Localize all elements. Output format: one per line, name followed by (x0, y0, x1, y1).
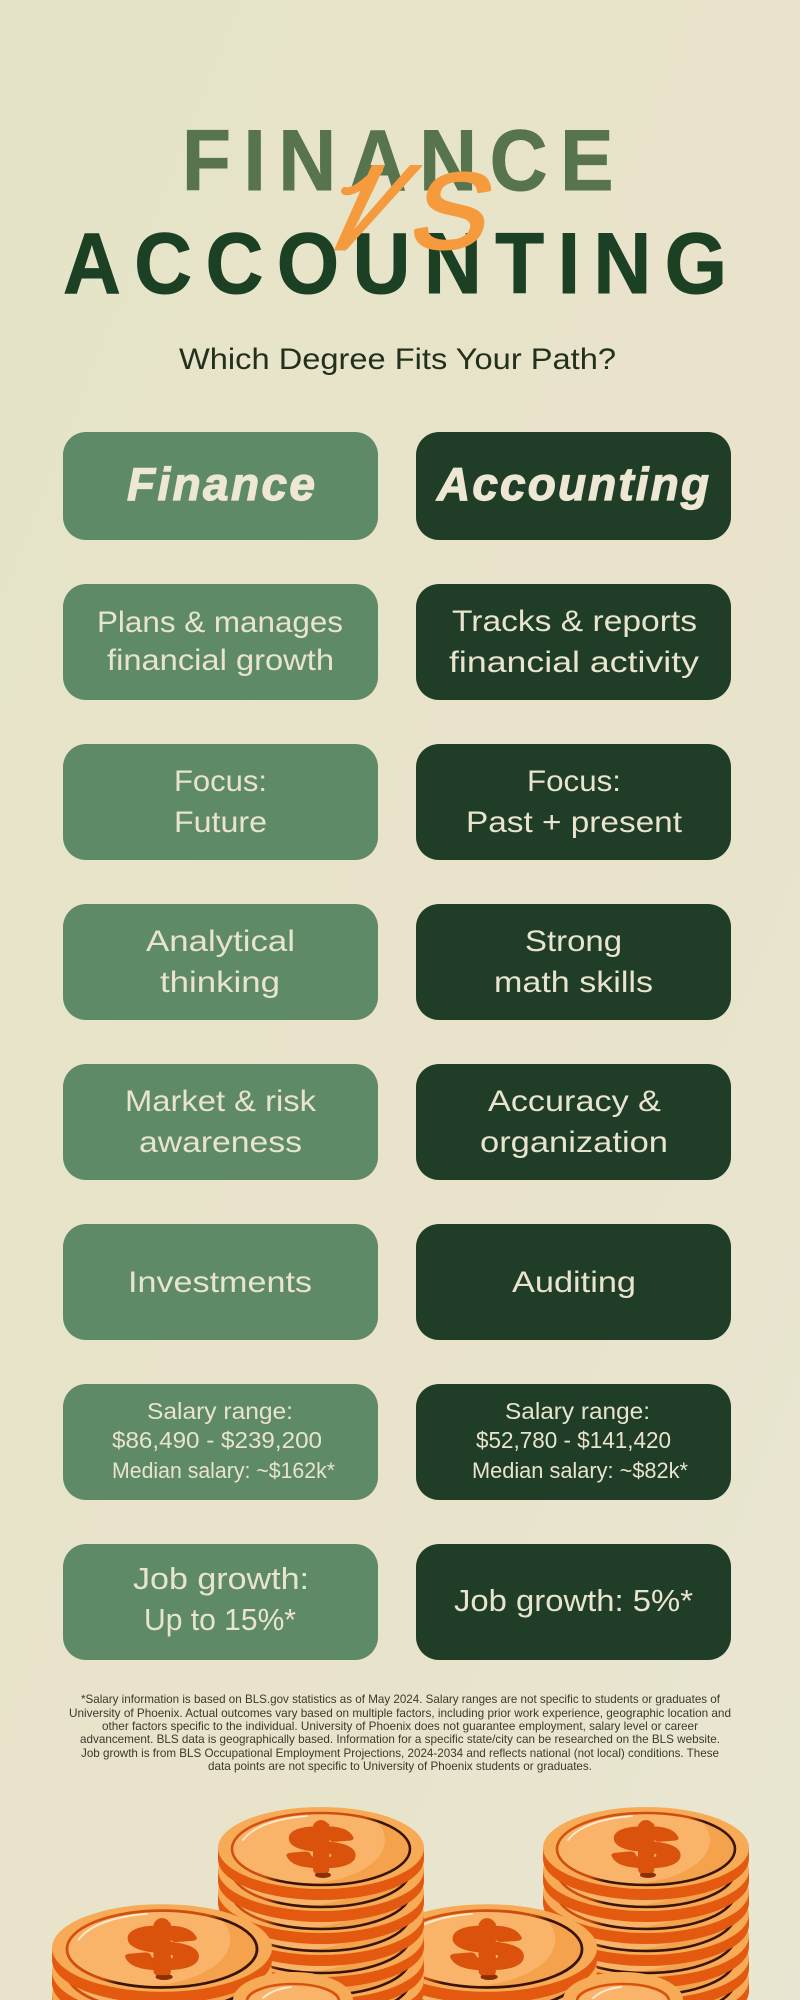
finance: awareness: Market & risk (125, 1085, 317, 1118)
title (63, 112, 727, 312)
coin stack: front left: $ (129, 1914, 195, 1981)
accounting: salary: Median salary: ~$82k* (472, 1458, 688, 1483)
panel: accounting column (416, 432, 731, 1660)
footnote: Job growth is from BLS Occupational Employment Projections, 2024-2034 and reflects national (not local) conditions. These (81, 1746, 719, 1760)
accounting: accuracy: organization (480, 1126, 668, 1159)
accounting: salary: $52,780 - $141,420 (476, 1427, 671, 1453)
accounting: skill: Strong (525, 925, 622, 958)
finance: definition: financial growth (107, 644, 334, 677)
finance: definition (63, 584, 378, 700)
accounting: focus (416, 744, 731, 860)
accounting: skill (416, 904, 731, 1020)
finance header (63, 432, 378, 540)
finance: skill: thinking (160, 966, 280, 999)
finance: salary (63, 1384, 378, 1500)
title accent: vs: S (400, 151, 506, 271)
title accent: vs: V (298, 142, 438, 275)
accounting: auditing: Auditing (512, 1266, 636, 1299)
finance: salary: Salary range: (147, 1398, 293, 1424)
footnote: advancement. BLS data is geographically based. Information for a specific state/city can be researched on the BLS website. (80, 1732, 720, 1746)
finance: focus: Future (174, 806, 267, 839)
accounting: accuracy: Accuracy & (488, 1085, 661, 1118)
accounting: focus: Focus: (527, 765, 621, 798)
accounting: definition: Tracks & reports (452, 605, 697, 638)
finance: awareness (63, 1064, 378, 1180)
finance: skill: Analytical (146, 925, 295, 958)
title: Finance: FINANCE (182, 112, 614, 209)
title accent: vs (298, 142, 506, 275)
accounting: auditing (416, 1224, 731, 1340)
accounting: job growth: Job growth: 5%* (454, 1583, 693, 1618)
finance: definition: Plans & manages (97, 606, 343, 639)
finance header: Finance (127, 458, 315, 510)
coin stack: back left: $ (290, 1816, 352, 1879)
coin stack: back left (213, 1796, 424, 2000)
accounting: definition: financial activity (449, 646, 699, 679)
finance: job growth: Up to 15%* (144, 1602, 296, 1637)
footnote: other factors specific to the individual. University of Phoenix does not guarantee employment, salary level or career (102, 1719, 698, 1733)
footnote (69, 1692, 731, 1773)
footnote: data points are not specific to University of Phoenix students or graduates. (208, 1759, 592, 1773)
panel: finance column (63, 432, 378, 1660)
coin stack: front middle: $ (454, 1914, 520, 1981)
accounting: definition (416, 584, 731, 700)
finance: job growth: Job growth: (133, 1561, 309, 1596)
accounting: skill: math skills (494, 966, 653, 999)
finance: investments (63, 1224, 378, 1340)
title: Accounting: ACCOUNTING (63, 215, 727, 312)
accounting: accuracy (416, 1064, 731, 1180)
coin stack: front left (47, 1892, 272, 2000)
finance: focus: Focus: (174, 765, 267, 798)
finance: skill (63, 904, 378, 1020)
coin stack: back right: $ (615, 1816, 677, 1879)
accounting: focus: Past + present (466, 806, 683, 839)
accounting header: Accounting (436, 458, 709, 510)
finance: investments: Investments (128, 1266, 312, 1299)
finance: job growth (63, 1544, 378, 1660)
subtitle: Which Degree Fits Your Path? (179, 343, 616, 376)
accounting: salary (416, 1384, 731, 1500)
footnote: *Salary information is based on BLS.gov statistics as of May 2024. Salary ranges are not specific to students or graduates of (81, 1692, 721, 1706)
finance: salary: $86,490 - $239,200 (112, 1427, 322, 1453)
footnote: University of Phoenix. Actual outcomes vary based on multiple factors, including prior work experience, geographic location and (69, 1706, 731, 1720)
accounting header (416, 432, 731, 540)
finance: awareness: awareness (139, 1126, 302, 1159)
coin stack: front middle (372, 1892, 597, 2000)
accounting: job growth (416, 1544, 731, 1660)
coin: small front right (563, 1972, 683, 2000)
finance: salary: Median salary: ~$162k* (112, 1458, 335, 1483)
coin stack: back right (538, 1796, 749, 2000)
accounting: salary: Salary range: (505, 1398, 650, 1424)
coin: small front left (233, 1972, 353, 2000)
icon: coin stacks (47, 1796, 749, 2000)
finance: focus (63, 744, 378, 860)
